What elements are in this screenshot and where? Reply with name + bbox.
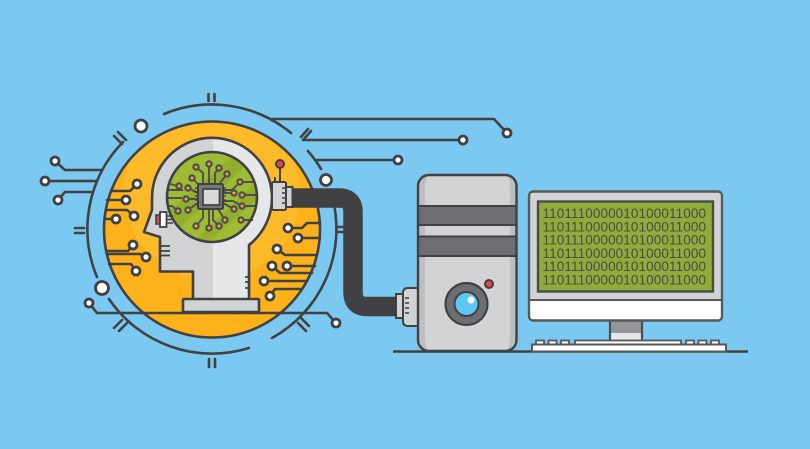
screen with binary text: 1101110000010100011000 <box>542 206 706 221</box>
tower lens button <box>446 283 488 325</box>
screen with binary text <box>538 202 713 292</box>
screen with binary text: 1101110000010100011000 <box>542 219 706 234</box>
head base <box>183 299 259 312</box>
ground line <box>393 350 748 353</box>
screen with binary text: 1101110000010100011000 <box>542 272 706 288</box>
orange disc <box>104 104 320 338</box>
outer circuit lines left <box>41 157 102 204</box>
monitor stand <box>610 320 642 340</box>
head silhouette <box>144 138 272 299</box>
computer connector <box>396 288 418 326</box>
brain traces <box>168 164 256 228</box>
bottom circuit line <box>85 299 340 327</box>
monitor <box>529 192 722 320</box>
ring dots <box>96 120 332 294</box>
screen with binary text: 1101110000010100011000 <box>542 246 706 261</box>
screen with binary text: 1101110000010100011000 <box>542 233 706 248</box>
ear plug <box>156 212 173 227</box>
head connector with antenna <box>272 160 292 210</box>
outer segmented ring <box>75 94 344 367</box>
cable <box>293 198 398 306</box>
brain nodes <box>175 161 245 231</box>
tower red light <box>485 280 493 288</box>
inner circuit lines left <box>105 180 150 275</box>
tower drive bays <box>418 206 516 256</box>
cpu chip <box>195 184 226 209</box>
computer tower <box>418 175 516 351</box>
inner circuit lines right <box>260 223 320 300</box>
brain circuit board <box>165 150 262 245</box>
keyboard <box>532 340 726 352</box>
screen with binary text: 1101110000010100011000 <box>542 259 706 274</box>
outer circuit lines top right <box>272 119 511 164</box>
